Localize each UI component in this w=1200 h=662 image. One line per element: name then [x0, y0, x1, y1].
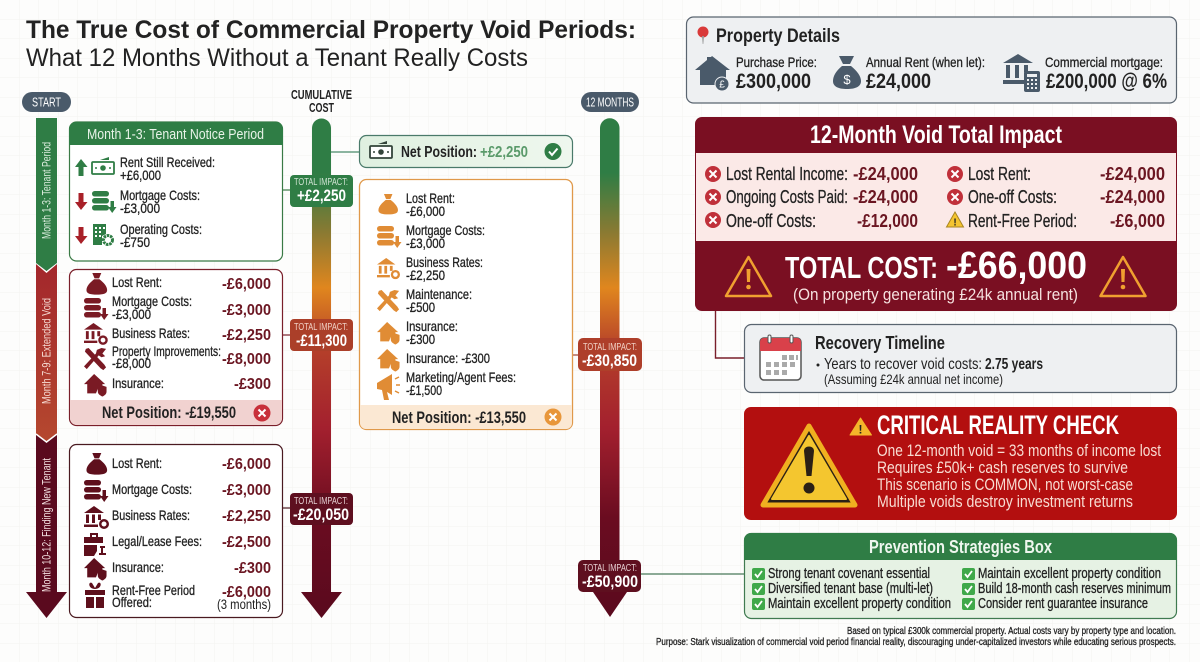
recovery text	[816, 356, 1043, 387]
badge: -20,050	[290, 493, 353, 525]
strategy list: Maintain excellent property condition	[768, 596, 951, 612]
rows: Mortgage Costs:	[112, 293, 192, 309]
badge: -11,300: TOTAL IMPACT:	[294, 322, 348, 333]
rows: (3 months)	[217, 597, 271, 612]
icon: large warning	[763, 426, 855, 505]
icons	[84, 453, 109, 608]
purchase price: £	[719, 80, 725, 90]
rows: Maintenance:	[406, 286, 472, 302]
rows: Insurance:	[406, 318, 458, 334]
timeline arrow: months: Month 7-9: Extended Void	[40, 298, 54, 404]
icon: rent received	[75, 157, 114, 176]
net position: +2,250: Net Position:	[401, 144, 477, 161]
status icons: !	[953, 218, 957, 228]
impact rows: One-off Costs:	[968, 187, 1057, 207]
rows: -£1,500	[406, 382, 442, 398]
rows: -£8,000	[112, 355, 151, 371]
title: The True Cost of Commercial Property Void Periods:	[26, 16, 636, 44]
operating text: -£750	[120, 234, 150, 250]
rows: -£300	[234, 376, 271, 393]
icon: warning left	[726, 257, 771, 296]
timeline arrow: months: Month 10-12: Finding New Tenant	[40, 458, 54, 592]
impact rows: -£12,000	[857, 211, 918, 231]
cumulative cost arrow	[301, 118, 342, 618]
rows: -£3,000	[406, 235, 445, 251]
badge: +2,250: TOTAL IMPACT:	[294, 177, 348, 188]
badge: -30,850	[578, 338, 642, 371]
annual rent: £24,000	[866, 70, 931, 93]
footnote	[656, 626, 1176, 648]
rows	[406, 190, 516, 398]
icon: operating costs	[75, 224, 112, 245]
impact rows	[726, 164, 1165, 231]
rows: -£6,000	[222, 456, 271, 473]
strategy list: Strong tenant covenant essential	[768, 566, 930, 582]
recovery text: Years to recover void costs:	[824, 356, 982, 373]
commercial mortgage: £200,000 @ 6%	[1046, 70, 1167, 93]
rows: Business Rates:	[406, 254, 483, 270]
12 months arrow	[593, 118, 627, 617]
rows: -£2,250	[406, 267, 445, 283]
reality check lines: This scenario is COMMON, not worst-case	[877, 475, 1133, 494]
timeline arrow: months	[26, 118, 67, 618]
badge: -11,300	[290, 319, 353, 351]
rows: -£300	[234, 560, 271, 577]
total cost: TOTAL COST:	[785, 250, 938, 285]
mortgage text	[120, 187, 200, 216]
panel: month 7-9 extended void	[70, 270, 282, 426]
impact rows: -£24,000	[853, 187, 918, 207]
badge: -50,900: TOTAL IMPACT:	[583, 563, 637, 574]
rows: Mortgage Costs:	[406, 222, 485, 238]
badge: -30,850: -£30,850	[582, 351, 637, 370]
recovery text: 2.75 years	[985, 356, 1043, 373]
icon: warning right	[1100, 257, 1146, 296]
impact rows: One-off Costs:	[726, 211, 816, 231]
badge: +2,250: +£2,250	[297, 186, 346, 205]
impact rows: -£24,000	[853, 164, 918, 184]
mortgage text: -£3,000	[120, 200, 160, 216]
rows: -£500	[406, 299, 435, 315]
icon: calendar	[760, 335, 801, 380]
rows: -£6,000	[406, 203, 445, 219]
total cost: (On property generating £24k annual rent)	[793, 285, 1078, 304]
icons	[377, 194, 402, 400]
impact rows: Lost Rent:	[968, 164, 1031, 184]
rows: -£300	[406, 331, 435, 347]
badge: +2,250	[290, 175, 353, 207]
net position: Net Position: -£19,550	[102, 404, 236, 422]
rows: Lost Rent:	[406, 190, 455, 206]
rows: -£6,000	[222, 276, 271, 293]
status icons	[705, 166, 964, 228]
purchase price	[695, 55, 817, 93]
rows: Business Rates:	[112, 507, 190, 523]
heading: Property Details	[716, 25, 840, 47]
icon: small warning	[850, 418, 872, 436]
annual rent: Annual Rent (when let):	[866, 55, 985, 70]
rows: -£6,000	[222, 584, 271, 601]
panel: recovery timeline	[744, 324, 1176, 392]
rows: -£2,250	[222, 327, 271, 344]
impact rows: Rent-Free Period:	[968, 211, 1077, 231]
panel: month 10-12 finding new tenant	[70, 444, 282, 618]
rent received text: Rent Still Received:	[120, 154, 215, 170]
icon: pin	[698, 26, 708, 44]
rows: Mortgage Costs:	[112, 481, 192, 497]
commercial mortgage: Commercial mortgage:	[1045, 55, 1163, 70]
rows: Business Rates:	[112, 325, 190, 341]
impact rows: Lost Rental Income:	[726, 164, 848, 184]
icon: small warning: !	[858, 422, 862, 436]
12 months pill	[581, 92, 639, 112]
net position: Net Position: -£13,550	[392, 409, 526, 427]
operating text	[120, 221, 202, 250]
rows: Legal/Lease Fees:	[112, 533, 202, 549]
reality check lines: Requires £50k+ cash reserves to survive	[877, 458, 1128, 477]
badge: -30,850: TOTAL IMPACT:	[583, 342, 637, 353]
rows	[112, 455, 271, 612]
rows: -£3,000	[112, 306, 151, 322]
rows: -£3,000	[222, 482, 271, 499]
purchase price: £300,000	[736, 70, 811, 93]
panel: critical reality check	[744, 407, 1177, 520]
strategy list	[768, 566, 1171, 612]
rows: -£8,000	[222, 351, 271, 368]
total cost	[785, 245, 1087, 304]
12 months pill: 12 MONTHS	[586, 96, 634, 110]
rent received text: +£6,000	[120, 167, 161, 183]
rent received text	[120, 154, 215, 183]
badge: -11,300: -£11,300	[296, 331, 347, 350]
cumulative cost heading: COST	[309, 101, 334, 115]
rows: -£3,000	[222, 302, 271, 319]
recovery text: (Assuming £24k annual net income)	[824, 371, 1003, 387]
panel: 12-month void total impact	[695, 117, 1177, 311]
rows: Insurance:	[112, 559, 164, 575]
impact rows: -£24,000	[1100, 187, 1165, 207]
rows: Rent-Free Period	[112, 582, 195, 598]
panel: month 1-3 tenant notice	[69, 122, 283, 261]
rows: -£2,500	[222, 534, 271, 551]
net position: +2,250	[360, 136, 572, 168]
operating text: Operating Costs:	[120, 221, 202, 237]
heading: 12-Month Void Total Impact	[810, 121, 1063, 149]
annual rent: $	[843, 72, 851, 87]
heading: tenant notice period: Month 1-3: Tenant Notice Period	[87, 126, 264, 143]
rows: Insurance:	[112, 375, 164, 391]
title	[26, 16, 636, 72]
start pill	[22, 92, 71, 112]
reality check lines	[877, 441, 1161, 511]
cumulative cost heading: CUMULATIVE	[291, 88, 352, 102]
heading: Recovery Timeline	[815, 332, 945, 353]
rows: Offered:	[112, 594, 152, 610]
reality check lines: Multiple voids destroy investment returns	[877, 492, 1133, 511]
strategy list: Diversified tenant base (multi-let)	[768, 581, 933, 597]
rows	[112, 274, 271, 393]
icon: mortgage costs	[75, 191, 116, 213]
impact rows: -£6,000	[1110, 211, 1165, 231]
impact rows: -£24,000	[1100, 164, 1165, 184]
strategy list: Consider rent guarantee insurance	[978, 596, 1148, 612]
badge: -50,900: -£50,900	[582, 572, 638, 591]
check icons	[752, 568, 975, 610]
rows: Lost Rent:	[112, 455, 162, 471]
rows: Lost Rent:	[112, 274, 162, 290]
impact rows: Ongoing Costs Paid:	[726, 187, 848, 207]
badge: -50,900	[578, 560, 641, 592]
start pill: START	[32, 96, 61, 110]
annual rent	[833, 55, 985, 93]
total cost: -£66,000	[946, 245, 1087, 287]
net position: +2,250: +£2,250	[480, 144, 528, 161]
badge: -20,050: -£20,050	[293, 505, 349, 524]
panel: prevention strategies	[744, 533, 1177, 618]
cumulative cost heading	[291, 88, 352, 115]
title: What 12 Months Without a Tenant Really Costs	[26, 44, 528, 72]
badge: -20,050: TOTAL IMPACT:	[294, 496, 348, 507]
rows: Property Improvements:	[112, 343, 221, 359]
connectors	[283, 152, 744, 574]
panel: property details	[686, 17, 1176, 103]
commercial mortgage	[1003, 54, 1167, 93]
purchase price: Purchase Price:	[736, 55, 817, 70]
heading: Prevention Strategies Box	[869, 536, 1053, 557]
timeline arrow: months: Month 1-3: Tenant Period	[40, 142, 54, 239]
rows: -£2,250	[222, 508, 271, 525]
mortgage text: Mortgage Costs:	[120, 187, 200, 203]
rows: Marketing/Agent Fees:	[406, 369, 516, 385]
icons	[84, 273, 108, 397]
rows: Insurance: -£300	[406, 350, 490, 366]
panel: month 4-6 void	[360, 180, 572, 430]
